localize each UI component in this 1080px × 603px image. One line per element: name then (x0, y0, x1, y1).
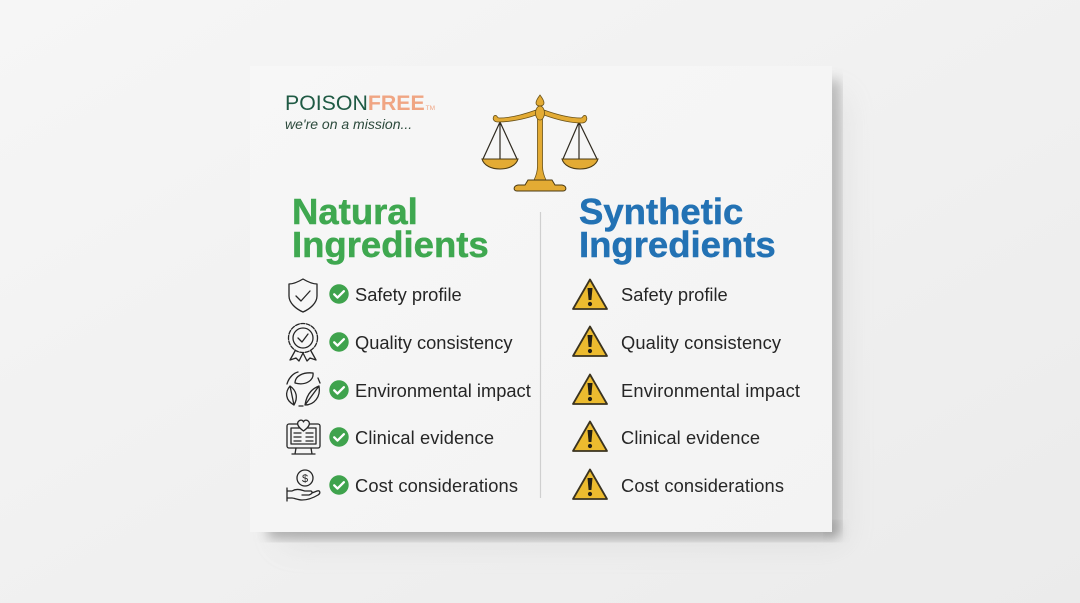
synthetic row: environmental impact: Environmental impact (621, 380, 800, 401)
icon: shield (289, 279, 317, 312)
icon: hand holding coin: $ (302, 473, 308, 485)
heading: synthetic ingredients: Synthetic (579, 191, 743, 232)
synthetic row: safety profile (573, 280, 728, 309)
tagline: we're on a mission... (285, 116, 412, 132)
synthetic row: environmental impact (573, 374, 800, 404)
icon: leaves (287, 372, 320, 406)
natural row: environmental impact: Environmental impact (355, 380, 531, 401)
icon: monitor with heart (287, 420, 320, 454)
natural row: safety profile: Safety profile (355, 284, 462, 305)
synthetic row: safety profile: Safety profile (621, 284, 728, 305)
synthetic row: quality consistency: Quality consistency (621, 332, 782, 353)
synthetic row: clinical evidence: Clinical evidence (621, 427, 760, 448)
icon: hand holding coin (287, 470, 320, 501)
natural row: quality consistency: Quality consistency (355, 332, 513, 353)
column divider (540, 212, 542, 498)
synthetic row: clinical evidence (573, 422, 760, 451)
synthetic row: cost considerations: Cost considerations (621, 475, 784, 496)
logo wordmark: POISONFREETM (285, 91, 435, 115)
card shadow (268, 80, 845, 545)
synthetic row: cost considerations (573, 470, 784, 499)
synthetic list (573, 280, 800, 499)
panel: comparison card (250, 66, 832, 532)
heading: synthetic ingredients: Ingredients (579, 224, 776, 265)
natural row: cost considerations: Cost considerations (355, 475, 518, 496)
heading: natural ingredients: Natural (292, 191, 418, 232)
icon: balance scale (482, 95, 598, 191)
icon: award rosette (288, 324, 318, 361)
heading: natural ingredients: Ingredients (292, 224, 489, 265)
natural row: clinical evidence: Clinical evidence (355, 427, 494, 448)
natural list (287, 279, 531, 501)
synthetic row: quality consistency (573, 326, 782, 356)
logo (285, 91, 435, 132)
